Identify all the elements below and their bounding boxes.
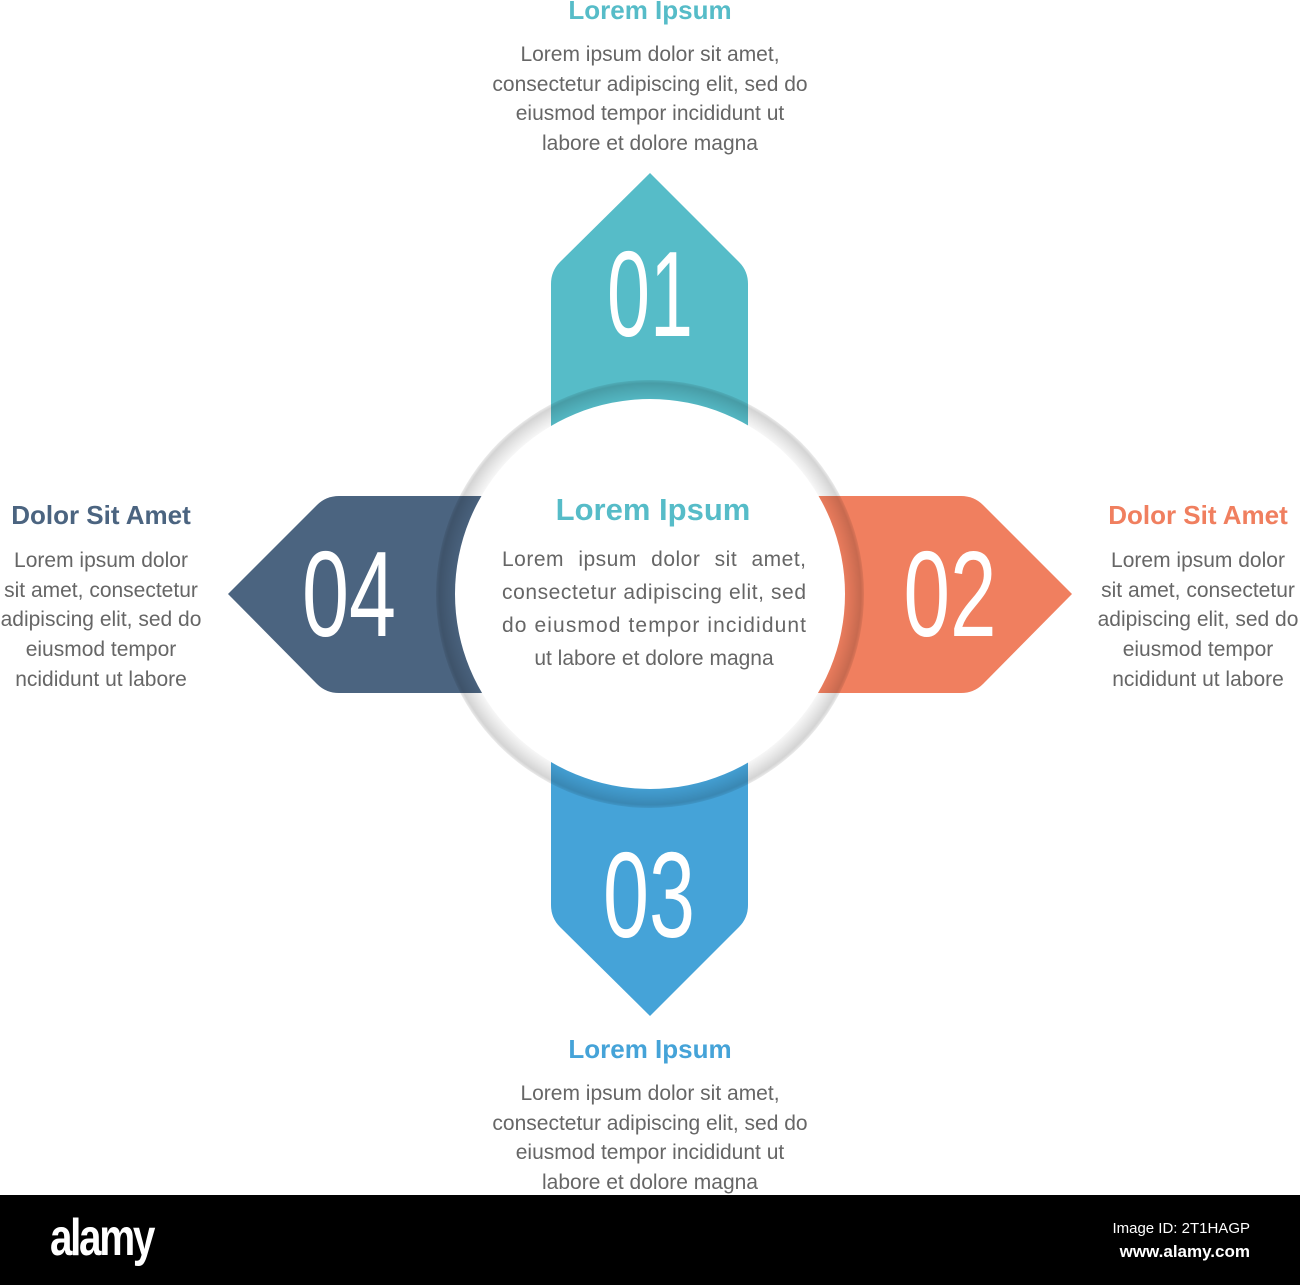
text block: right: sit amet, consectetur (1101, 579, 1295, 602)
text block: right: ncididunt ut labore (1112, 668, 1284, 691)
arrow: 03 bottom (551, 600, 748, 1016)
text block: bottom: consectetur adipiscing elit, sed do (492, 1112, 808, 1135)
arrow: 04 left (228, 496, 600, 693)
arrow: 02 right (700, 496, 1072, 693)
text block: top: labore et dolore magna (542, 132, 758, 155)
center text: do eiusmod tempor incididunt (502, 614, 806, 637)
center text: consectetur adipiscing elit, sed (502, 581, 806, 604)
center circle (436, 380, 864, 808)
arrow: 01 top (551, 173, 748, 600)
text block: left: Lorem ipsum dolor (14, 549, 188, 572)
text block: left: ncididunt ut labore (15, 668, 187, 691)
text block: bottom: eiusmod tempor incididunt ut (516, 1141, 784, 1164)
text block: top (492, 43, 808, 155)
footer band (0, 1195, 1300, 1285)
center text: Lorem ipsum dolor sit amet, (502, 548, 806, 571)
text block: right: Lorem ipsum dolor (1111, 549, 1285, 572)
heading: right: Dolor Sit Amet (1108, 500, 1288, 530)
center text: ut labore et dolore magna (534, 647, 774, 670)
arrow: 02 right: 02 (904, 526, 996, 662)
text block: top: consectetur adipiscing elit, sed do (492, 73, 808, 96)
text block: right (1098, 549, 1298, 691)
arrow: 03 bottom: 03 (603, 827, 695, 963)
text block: top: Lorem ipsum dolor sit amet, (520, 43, 780, 66)
text block: left: sit amet, consectetur (4, 579, 198, 602)
center heading: Lorem Ipsum (556, 492, 750, 527)
center text (502, 548, 806, 670)
text block: bottom (492, 1082, 808, 1194)
text block: bottom: labore et dolore magna (542, 1171, 758, 1194)
footer id: Image ID: 2T1HAGP (1112, 1220, 1250, 1237)
text block: bottom: Lorem ipsum dolor sit amet, (520, 1082, 780, 1105)
text block: top: eiusmod tempor incididunt ut (516, 102, 784, 125)
heading: bottom: Lorem Ipsum (568, 1034, 732, 1064)
text block: left: adipiscing elit, sed do (1, 608, 201, 631)
text block: right: adipiscing elit, sed do (1098, 608, 1298, 631)
text block: left (1, 549, 201, 691)
footer url: www.alamy.com (1119, 1242, 1250, 1261)
text block: left: eiusmod tempor (26, 638, 176, 661)
arrow: 04 left: 04 (302, 526, 396, 662)
footer logo: alamy (50, 1209, 155, 1267)
heading: left: Dolor Sit Amet (11, 500, 191, 530)
text block: right: eiusmod tempor (1123, 638, 1273, 661)
arrow: 01 top: 01 (607, 226, 693, 362)
